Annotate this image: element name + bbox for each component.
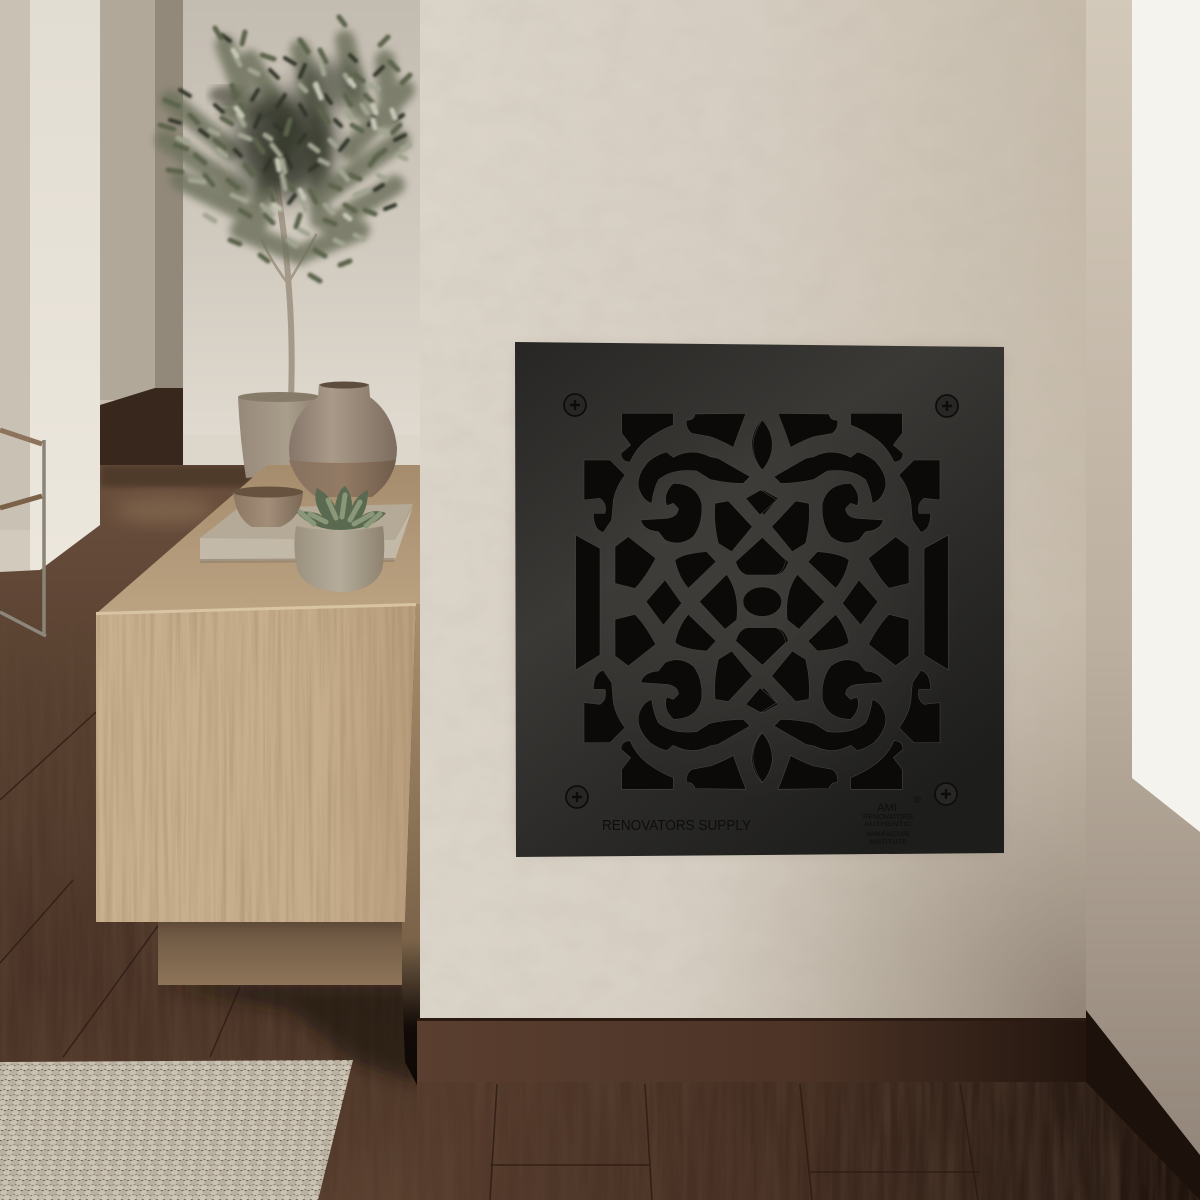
certification mark: AMI: [877, 802, 897, 814]
book on console: [200, 504, 413, 563]
succulent plant: [296, 486, 386, 530]
console top surface: [97, 465, 420, 613]
certification mark: [863, 795, 921, 846]
wood floor: left room: [0, 465, 420, 1200]
chair frame: [0, 430, 46, 636]
foliage masses: [165, 40, 405, 255]
planter behind vase: [238, 392, 320, 478]
pale leaves: [233, 50, 395, 219]
window light: [1132, 0, 1200, 832]
wooden bowl: [233, 486, 303, 527]
light leaves: [178, 55, 410, 246]
screw top left: [564, 394, 586, 416]
black decorative grille: [515, 342, 1004, 857]
olive tree: [160, 17, 410, 400]
brand text: RENOVATORS SUPPLY: [602, 818, 751, 834]
main wall: [420, 0, 1088, 1020]
rug: [0, 1060, 353, 1200]
certification mark: AUTHENTIC: [864, 822, 913, 828]
grille cutouts: [576, 413, 948, 789]
screw bottom left: [566, 786, 588, 808]
screw top right: [936, 395, 958, 417]
shadow under the console: [158, 985, 420, 1085]
grille plate: [515, 342, 1004, 857]
tree trunk and branches: [262, 180, 316, 400]
certification mark: INSTITUTE: [869, 840, 907, 846]
screw bottom right: [935, 783, 957, 805]
center oval: [743, 587, 782, 616]
background: hallway walls behind the console: [0, 0, 420, 640]
certification mark: RENOVATORS: [863, 814, 913, 821]
baseboard: [417, 1010, 1200, 1200]
olive leaves: [160, 17, 410, 281]
floor: foreground: [417, 1082, 1200, 1200]
mid leaves: [160, 17, 410, 281]
large ceramic vase: [289, 382, 397, 497]
succulent pot: [294, 526, 384, 592]
certification mark: MANUFACTURE: [866, 832, 910, 838]
right wall: [1086, 0, 1200, 1155]
console plinth: [158, 922, 402, 985]
dark leaves: [170, 35, 405, 209]
certification mark: ®: [913, 795, 921, 806]
wall shadow under grille plate: [520, 350, 1000, 850]
console cabinet front: [96, 603, 420, 1085]
